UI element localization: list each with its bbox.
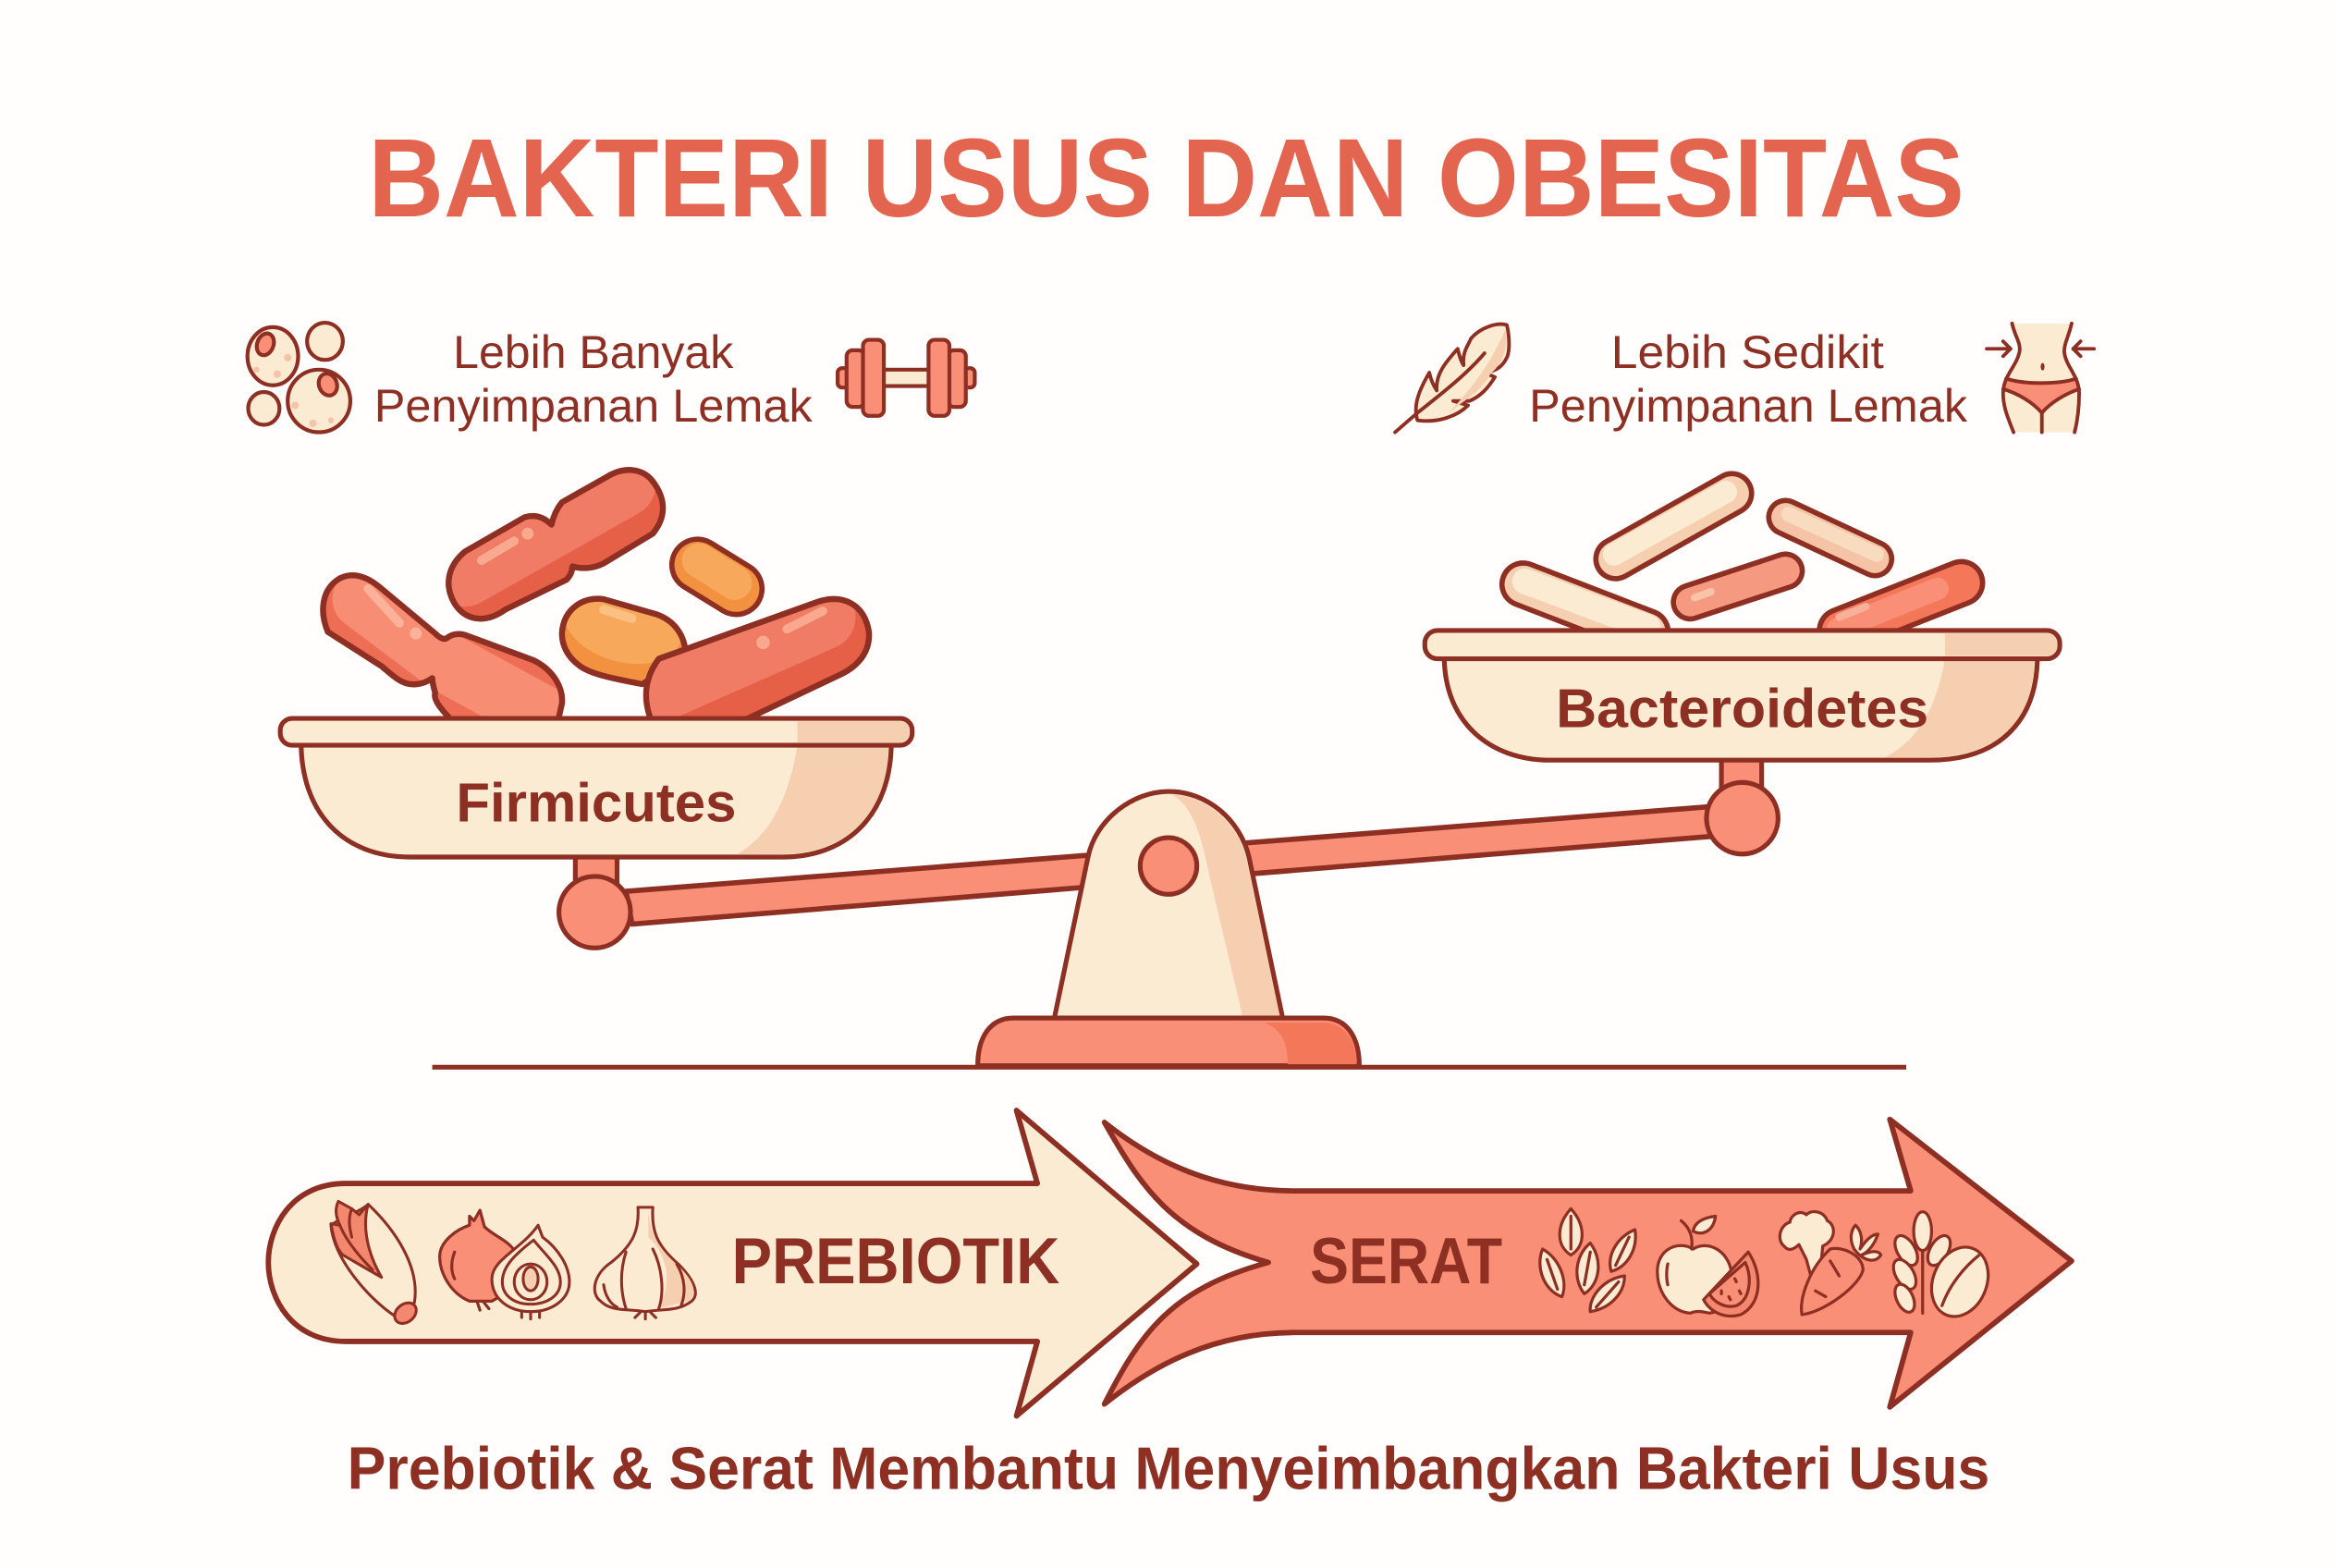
arrow: prebiotik	[268, 1110, 1197, 1416]
infographic canvas	[246, 139, 2097, 1501]
arrow: serat	[1105, 1120, 2072, 1407]
label: Firmicutes: Firmicutes	[456, 771, 736, 833]
fulcrum	[978, 791, 1359, 1066]
bacterium: lobed top rod	[448, 470, 663, 619]
bacterium: red right rod	[1838, 582, 1962, 631]
bacterium: red middle rod	[1690, 570, 1785, 602]
bacterium: large red rod	[643, 595, 873, 716]
text: more fat storage: Lebih Banyak	[453, 326, 734, 378]
bacterium: peach rod	[1785, 514, 1877, 559]
bacterium: orange large	[558, 595, 688, 688]
right bowl	[1444, 655, 2037, 760]
left post and ball	[559, 854, 630, 948]
left rim	[280, 718, 912, 745]
text: less fat storage: Lebih Sedikit	[1611, 326, 1884, 378]
icon: seeds	[1540, 1208, 1635, 1312]
text: more fat storage	[374, 326, 814, 432]
bacterium: cream left rod	[1523, 582, 1648, 632]
label: PREBIOTIK: PREBIOTIK	[732, 1225, 1059, 1298]
bacterium: cream top rod	[1614, 492, 1731, 559]
bacterium: orange small	[698, 560, 736, 589]
icon: broccoli and carrot	[1780, 1212, 1881, 1315]
right pan: Bacteroidetes	[1425, 631, 2060, 854]
icon: chicory	[331, 1201, 421, 1328]
left bowl	[301, 742, 891, 857]
icon: feather	[1395, 325, 1509, 433]
icon: garlic	[594, 1207, 695, 1319]
left pan: Firmicutes	[280, 718, 912, 948]
icon: shallot	[440, 1210, 517, 1310]
label: SERAT: SERAT	[1310, 1225, 1502, 1298]
ground line	[433, 1066, 1906, 1069]
text: more fat storage: Penyimpanan Lemak	[374, 380, 814, 432]
text: less fat storage: Penyimpanan Lemak	[1529, 380, 1968, 432]
fulcrum pillar	[1054, 791, 1283, 1021]
caption: Prebiotik & Serat Membantu Menyeimbangkan Bakteri Usus	[348, 1436, 1989, 1502]
bacteria: Bacteroidetes	[1523, 492, 1962, 632]
bacteria: Firmicutes	[323, 470, 869, 730]
text: less fat storage	[1529, 326, 1968, 432]
icon: cut onion	[492, 1225, 569, 1319]
fulcrum base	[978, 1018, 1359, 1066]
right post and ball	[1707, 757, 1778, 854]
right rim	[1425, 631, 2060, 659]
balance beam	[626, 806, 1714, 925]
icon: apple and melon	[1658, 1217, 1758, 1317]
pivot	[1140, 838, 1197, 894]
title: BAKTERI USUS DAN OBESITAS	[368, 116, 1964, 240]
label: Bacteroidetes: Bacteroidetes	[1556, 678, 1928, 740]
icon: dumbbell	[838, 340, 974, 416]
icon: wheat and seed	[1889, 1212, 1998, 1325]
icon: slim waist	[1987, 324, 2094, 433]
bacterium: lobed left rod	[323, 575, 562, 730]
icon: fat cells	[248, 323, 350, 433]
